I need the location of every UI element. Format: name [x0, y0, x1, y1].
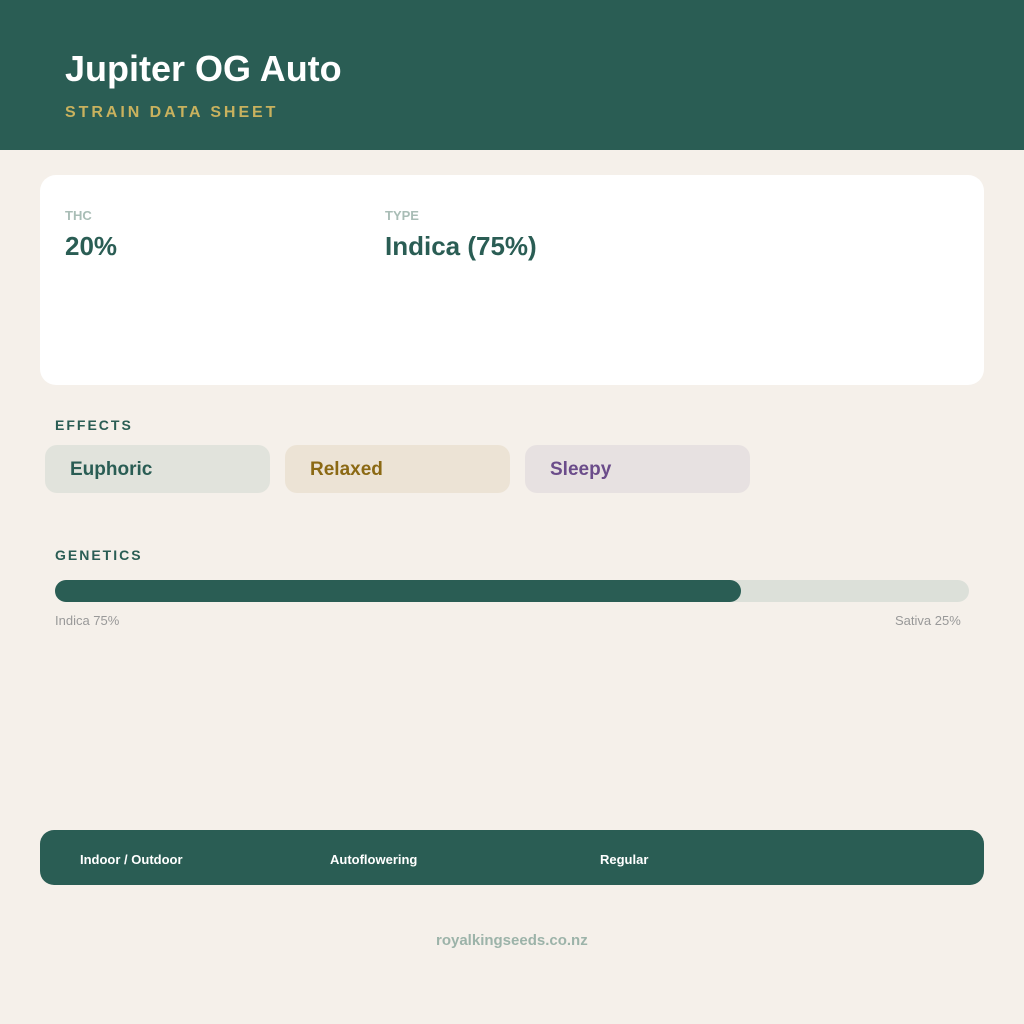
- panel: key stats: [40, 175, 984, 385]
- indica share of bar: [55, 580, 741, 602]
- attribute: flowering: Autoflowering: [330, 852, 417, 867]
- genetics heading: GENETICS: [55, 547, 143, 563]
- attribute: seed type: Regular: [600, 852, 648, 867]
- attribute: environment: Indoor / Outdoor: [80, 852, 183, 867]
- effect pill: Relaxed: [285, 445, 510, 493]
- header band: [0, 0, 1024, 150]
- sativa label: Sativa 25%: [895, 613, 961, 628]
- effect pill: Sleepy: [525, 445, 750, 493]
- subtitle: STRAIN DATA SHEET: [65, 104, 278, 121]
- genetics bar: [55, 580, 969, 602]
- effect pill: Euphoric: Euphoric: [70, 459, 152, 480]
- effect pill: Relaxed: Relaxed: [310, 459, 383, 480]
- effect pill: Sleepy: Sleepy: [550, 459, 611, 480]
- title: Jupiter OG Auto: [65, 48, 342, 89]
- panel: growing attributes: [40, 830, 984, 885]
- indica label: Indica 75%: [55, 613, 119, 628]
- type value: Indica (75%): [385, 231, 537, 261]
- effect pill: Euphoric: [45, 445, 270, 493]
- footer website: royalkingseeds.co.nz: [436, 932, 588, 949]
- THC label: THC: [65, 208, 92, 223]
- type label: TYPE: [385, 208, 419, 223]
- effects heading: EFFECTS: [55, 417, 133, 433]
- THC value: 20%: [65, 231, 117, 261]
